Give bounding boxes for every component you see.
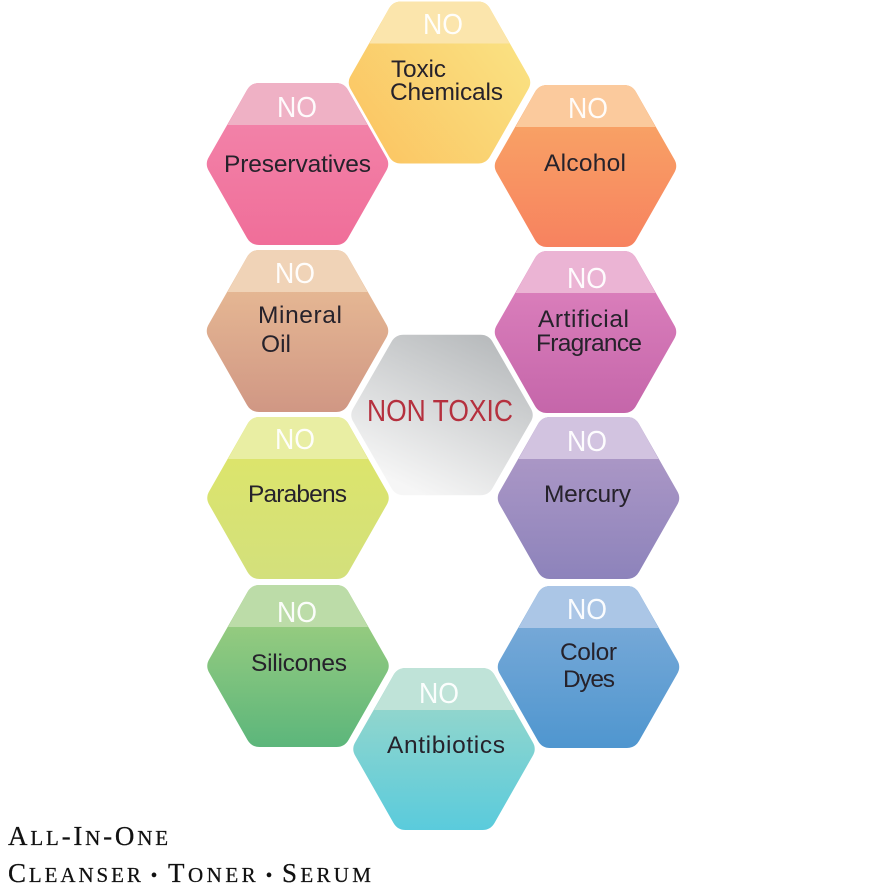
hexagon: Silicones: NO [277,597,317,629]
hexagon: Non Toxic center: NON TOXIC [367,394,513,428]
hexagon: Alcohol: Alcohol [544,150,626,177]
hexagon: Artificial Fragrance: NO [567,263,607,295]
hexagon: Color Dyes: Color [560,639,617,666]
hexagon: Antibiotics [353,668,535,830]
hexagon: Preservatives [207,83,388,245]
hexagon: Artificial Fragrance: Fragrance [536,330,642,357]
hexagon: Toxic Chemicals: Toxic [391,56,446,83]
hexagon: Alcohol [495,85,676,247]
hexagon: Toxic Chemicals [349,2,530,164]
hexagon: Parabens [207,417,389,579]
hexagon: Antibiotics: NO [419,678,459,710]
hexagon: Parabens: Parabens [248,481,347,508]
footer text: Cleanser Toner Serum [8,858,374,886]
hexagon: Mercury: Mercury [544,481,632,508]
footer text: All-In-One: ALL-IN-ONE [8,821,171,851]
hexagon: Alcohol: NO [568,93,608,125]
hexagon: Toxic Chemicals: Chemicals [390,79,503,106]
hexagon: Mineral Oil: Mineral [258,302,342,329]
hexagon: Mineral Oil: Oil [261,331,291,358]
hexagon: Silicones: Silicones [251,650,347,677]
hexagon: Color Dyes [498,586,679,748]
hexagon: Antibiotics: Antibiotics [387,732,505,759]
hexagon: Preservatives: Preservatives [224,151,371,178]
hexagon: Non Toxic center [351,335,533,495]
hexagon: Mineral Oil: NO [275,258,315,290]
hexagon: Mineral Oil [207,250,388,412]
hexagon: Preservatives: NO [277,92,317,124]
hexagon: Toxic Chemicals: NO [423,9,463,41]
hexagon: Mercury [498,417,679,579]
hexagon: Color Dyes: Dyes [563,666,615,693]
hexagon: Silicones [207,585,389,747]
hexagon: Artificial Fragrance [495,251,676,413]
hexagon: Artificial Fragrance: Artificial [538,306,629,333]
hexagon: Mercury: NO [567,426,607,458]
hexagon: Color Dyes: NO [567,594,607,626]
hexagon: Parabens: NO [275,424,315,456]
